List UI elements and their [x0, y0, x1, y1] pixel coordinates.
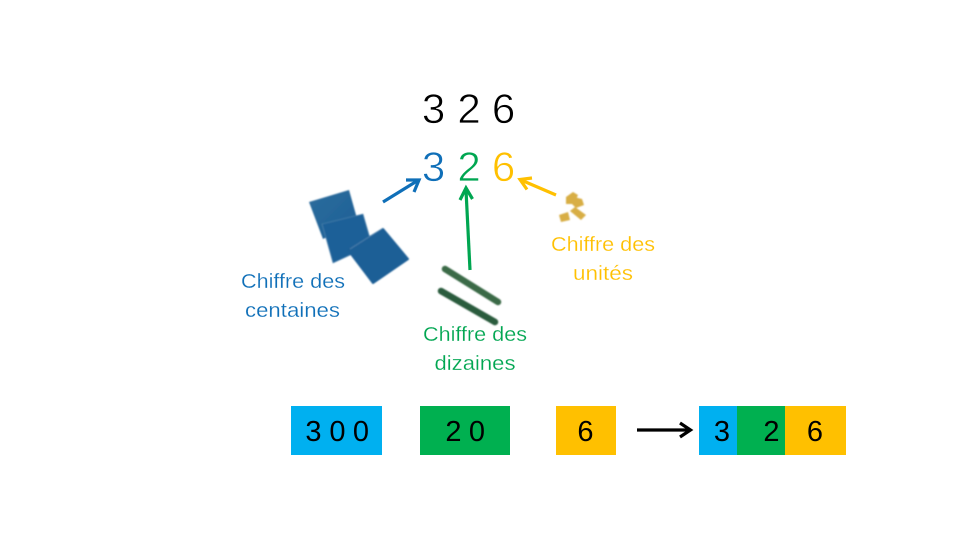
label: units digit	[551, 234, 655, 285]
box: 300	[291, 406, 382, 455]
coloured number 326: 6	[492, 143, 515, 190]
box: 20	[420, 406, 510, 455]
combined number box 326: 3	[714, 416, 730, 448]
label: hundreds digit	[241, 271, 345, 322]
title: number in black	[422, 85, 515, 132]
coloured number 326	[422, 143, 515, 190]
label: hundreds digit: centaines	[245, 300, 340, 322]
label: units digit: Chiffre des	[551, 234, 655, 256]
icon: tens rods	[441, 269, 498, 322]
box: 300: 3	[305, 416, 322, 448]
arrow: boxes to combined number	[637, 423, 690, 437]
icon: unit cubes	[559, 192, 586, 222]
title: number in black: 2	[457, 85, 481, 132]
coloured number 326: 2	[457, 143, 481, 190]
combined number box 326: 2	[763, 416, 780, 448]
label: tens digit	[423, 324, 527, 375]
combined number box 326	[699, 406, 846, 455]
box: 300: 0	[353, 416, 369, 448]
box: 6	[556, 406, 616, 455]
label: units digit: unités	[573, 263, 633, 285]
arrow: unit cubes to digit 6	[520, 178, 556, 195]
box: 6: 6	[577, 416, 594, 448]
arrow: hundreds plates to digit 3	[383, 180, 419, 202]
coloured number 326: 3	[422, 143, 445, 190]
title: number in black: 3	[422, 85, 445, 132]
box: 300: 0	[329, 416, 346, 448]
label: tens digit: Chiffre des	[423, 324, 527, 346]
box: 20: 0	[469, 416, 485, 448]
label: hundreds digit: Chiffre des	[241, 271, 345, 293]
label: tens digit: dizaines	[434, 353, 516, 375]
combined number box 326: 6	[807, 416, 823, 448]
title: number in black: 6	[492, 85, 515, 132]
icon: hundreds plates	[309, 190, 408, 283]
arrow: tens rods to digit 2	[460, 188, 472, 270]
box: 20: 2	[445, 416, 462, 448]
